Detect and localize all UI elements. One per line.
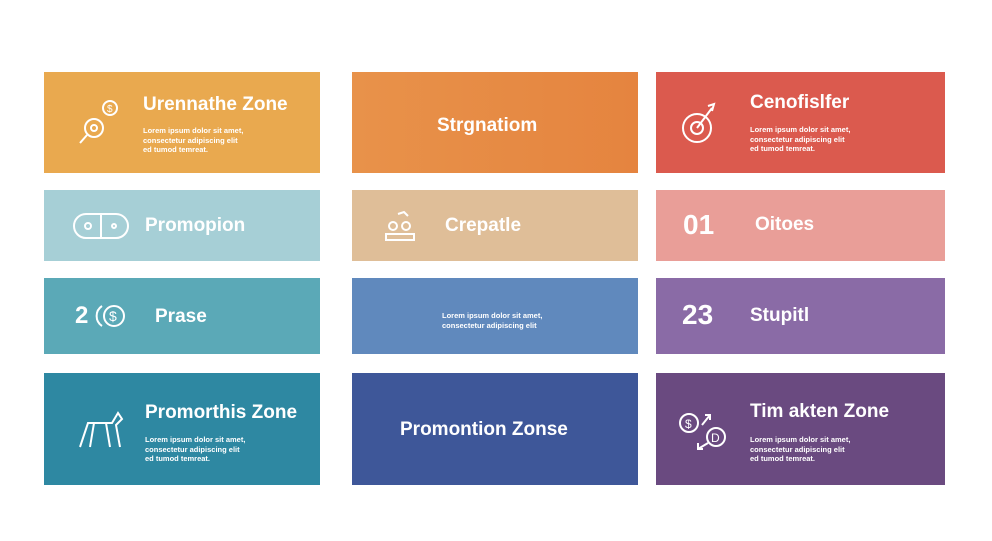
icon: people (385, 210, 415, 241)
panel: Urennathe Zone (44, 72, 320, 173)
icon: search money (79, 100, 118, 144)
panel: Cenofislfer: ed tumod temreat. (750, 144, 815, 153)
panel: Promontion Zonse (352, 373, 638, 485)
panel: Tim akten Zone (656, 373, 945, 485)
panel: Strgnatiom: Strgnatiom (437, 115, 537, 136)
panel: Promorthis Zone: consectetur adipiscing elit (145, 444, 240, 454)
panel: middle lorem (352, 278, 638, 354)
icon: coin (96, 305, 125, 327)
panel: Promopion (44, 190, 320, 261)
icon: target (682, 102, 716, 143)
panel: Prase: 2 (75, 302, 88, 329)
panel: Prase: Prase (155, 306, 207, 327)
panel: Oitoes: 01 (683, 209, 714, 240)
panel: Tim akten Zone: consectetur adipiscing elit (750, 444, 845, 454)
icon: currency exchange (679, 413, 726, 450)
text: ed tumod temreat. (143, 145, 208, 154)
panel: Cenofislfer: Cenofislfer (750, 92, 849, 113)
text: consectetur adipiscing elit (143, 136, 238, 144)
panel: Stupitl: 23 (682, 299, 713, 330)
panel: Stupitl: Stupitl (750, 305, 809, 326)
panel: Crepatle: Crepatle (445, 215, 521, 236)
panel: middle lorem: Lorem ipsum dolor sit amet, (442, 311, 542, 320)
panel: Tim akten Zone: ed tumod temreat. (750, 454, 815, 463)
panel: Prase (44, 278, 320, 354)
icon: currency exchange: D (711, 431, 720, 445)
panel: Promorthis Zone: Lorem ipsum dolor sit amet, (145, 435, 245, 444)
panel: Cenofislfer: Lorem ipsum dolor sit amet, (750, 125, 850, 134)
panel: Promontion Zonse: Promontion Zonse (400, 419, 568, 440)
panel: Oitoes: Oitoes (755, 214, 814, 235)
panel: Oitoes (656, 190, 945, 261)
panel: Promorthis Zone: Promorthis Zone (145, 402, 297, 423)
icon: capsule (73, 213, 129, 239)
panel: Strgnatiom (352, 72, 638, 173)
panel: Cenofislfer (656, 72, 945, 173)
panel: Tim akten Zone: Lorem ipsum dolor sit amet, (750, 435, 850, 444)
icon: currency exchange: $ (685, 417, 692, 431)
panel: Stupitl (656, 278, 945, 354)
panel: Promorthis Zone (44, 373, 320, 485)
icon: coin: $ (109, 308, 117, 324)
text (143, 126, 243, 154)
panel: Cenofislfer: consectetur adipiscing elit (750, 134, 845, 144)
icon: search money: $ (107, 104, 113, 115)
title: Urennathe Zone (143, 94, 288, 115)
icon: animal (79, 411, 124, 448)
panel: Tim akten Zone: Tim akten Zone (750, 401, 889, 422)
panel: Promopion: Promopion (145, 215, 245, 236)
panel: Promorthis Zone: ed tumod temreat. (145, 454, 210, 463)
panel: Crepatle (352, 190, 638, 261)
panel: middle lorem: consectetur adipiscing elit (442, 320, 537, 330)
text: Lorem ipsum dolor sit amet, (143, 126, 243, 135)
